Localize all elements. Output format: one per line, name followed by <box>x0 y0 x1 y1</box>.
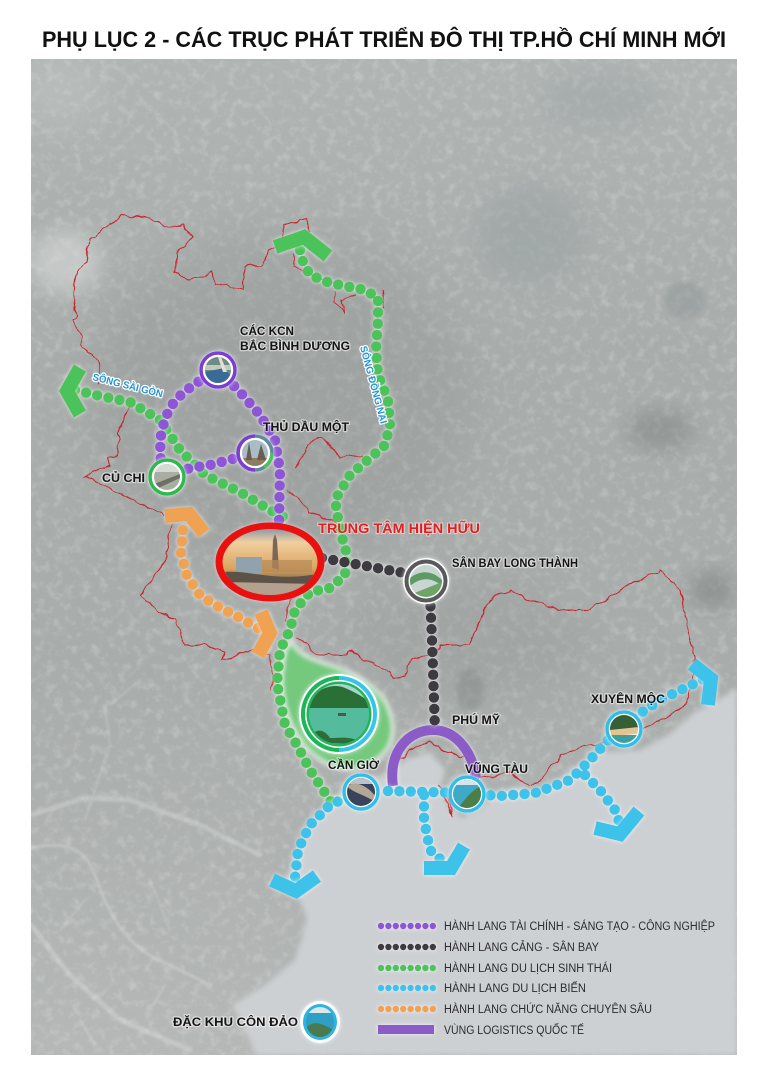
node: Long Thanh airport <box>403 558 449 604</box>
label: Dac khu Con Dao: ĐẶC KHU CÔN ĐẢO <box>173 1014 298 1029</box>
node: Cu Chi <box>148 458 186 496</box>
legend row: port corridor: HÀNH LANG CẢNG - SÂN BAY <box>444 941 599 954</box>
node: Xuyen Moc <box>605 710 643 748</box>
label: Cac KCN Bac Binh Duong: CÁC KCN <box>240 323 294 338</box>
node: KCN Bac Binh Duong <box>199 351 237 389</box>
node: Can Gio mangrove photo <box>299 674 379 754</box>
legend row: coastal corridor: HÀNH LANG DU LỊCH BIỂN <box>444 982 586 995</box>
corridor: coastal tourism (cyan) <box>294 676 710 888</box>
label: Trung tam hien huu: TRUNG TÂM HIỆN HỮU <box>318 519 480 536</box>
legend row: ecotourism corridor: HÀNH LANG DU LỊCH SINH THÁI <box>444 962 612 975</box>
corridor: ecotourism (green) <box>75 250 390 808</box>
arrow: orange top <box>165 514 204 533</box>
international logistics arc <box>392 730 476 786</box>
legend <box>378 920 715 1037</box>
arrow: cyan south middle <box>424 846 464 868</box>
Can Gio mangrove zone <box>281 640 393 769</box>
corridor: finance and industry (purple) <box>160 370 280 525</box>
province boundary <box>72 215 695 815</box>
node: Vung Tau <box>448 775 486 813</box>
label: Cu Chi: CỦ CHI <box>102 470 145 485</box>
arrow: cyan south-west <box>272 876 317 891</box>
arrow: cyan south-east <box>595 811 639 834</box>
arrow: west green <box>67 368 80 414</box>
node: Thu Dau Mot <box>236 434 274 472</box>
label: San bay Long Thanh: SÂN BAY LONG THÀNH <box>452 555 578 570</box>
node: Can Gio port <box>342 773 380 811</box>
legend row: logistics zone <box>378 1023 584 1037</box>
legend row: specialised corridor: HÀNH LANG CHỨC NĂNG CHUYÊN SÂU <box>444 1003 652 1016</box>
node: Con Dao special zone <box>173 1001 340 1043</box>
arrow: cyan north-east <box>692 664 711 705</box>
label: Song Dong Nai: SÔNG ĐỒNG NAI <box>357 344 390 425</box>
legend row: logistics zone: VÙNG LOGISTICS QUỐC TẾ <box>444 1023 584 1037</box>
corridor: specialised function (orange) <box>181 530 265 632</box>
label: Can Gio: CẦN GIỜ <box>328 757 380 772</box>
arrow heads <box>67 237 711 891</box>
node: Trung tam hien huu <box>216 523 324 601</box>
label: Phu My: PHÚ MỸ <box>452 712 500 727</box>
label: Xuyen Moc: XUYÊN MỘC <box>591 691 665 706</box>
arrow: north green <box>275 237 328 256</box>
label: Song Sai Gon: SÔNG SÀI GÒN <box>91 370 164 400</box>
arrow: orange bottom <box>258 612 270 655</box>
title: PHỤ LỤC 2 - CÁC TRỤC PHÁT TRIỂN ĐÔ THỊ TP.HỒ CHÍ MINH MỚI <box>42 27 726 52</box>
labels: place names <box>91 323 665 776</box>
label: Thu Dau Mot: THỦ DẦU MỘT <box>263 419 350 434</box>
legend row: finance corridor: HÀNH LANG TÀI CHÍNH - SÁNG TẠO - CÔNG NGHIỆP <box>444 920 715 933</box>
label: Cac KCN Bac Binh Duong: BẮC BÌNH DƯƠNG <box>240 338 350 353</box>
label: Vung Tau: VŨNG TÀU <box>465 761 528 776</box>
corridor: port and airport (black) <box>322 558 435 731</box>
